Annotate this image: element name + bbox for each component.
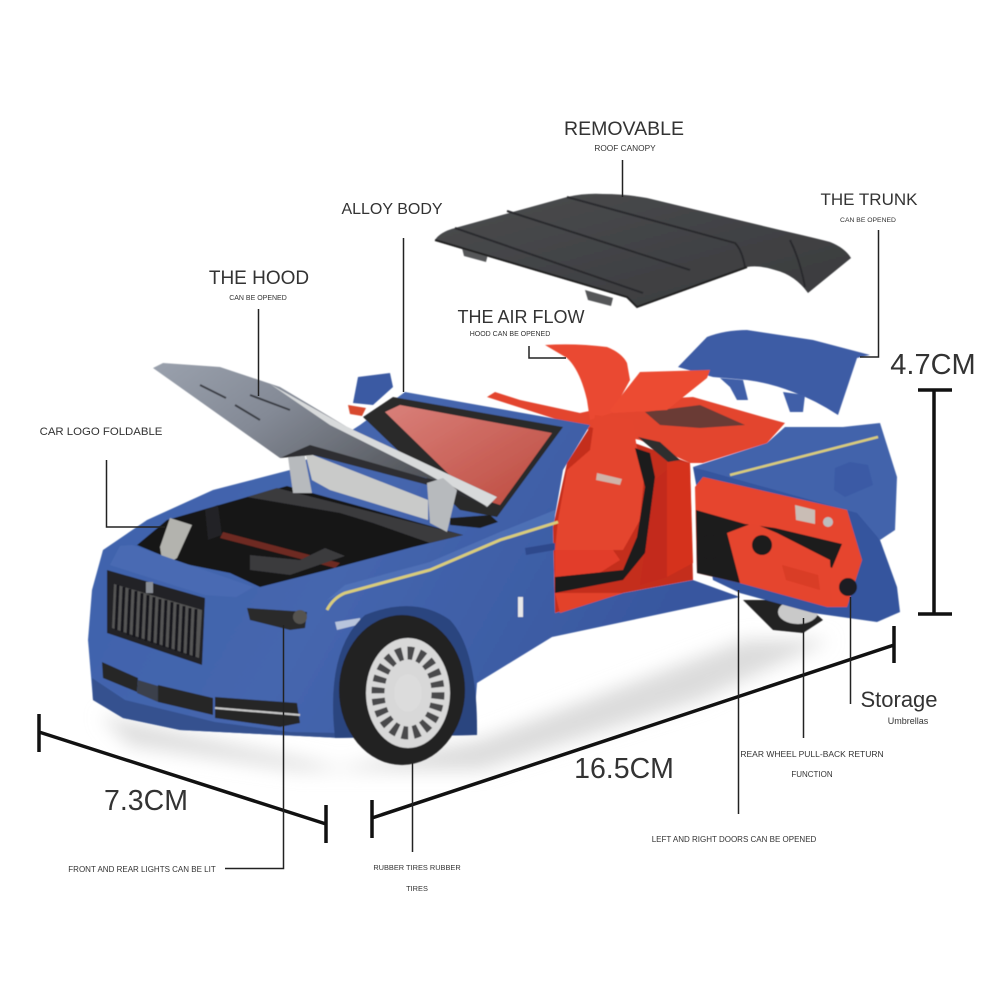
label: storage: Storage [860, 687, 938, 712]
engine bay [137, 486, 463, 587]
bumper vents [102, 662, 300, 727]
label: rear wheel [740, 749, 884, 779]
door mirror [834, 462, 873, 497]
hood slots [200, 385, 290, 420]
main body [88, 392, 740, 738]
rear red deck [487, 392, 785, 463]
seat cushion [555, 550, 620, 577]
label: the trunk [821, 190, 918, 224]
door handle [795, 505, 815, 524]
label: the trunk: CAN BE OPENED [840, 217, 896, 224]
nose panel [110, 545, 253, 597]
label: the hood: THE HOOD [209, 268, 309, 289]
label: the hood [209, 268, 309, 302]
leader line: logo [106, 460, 165, 527]
engine detail [220, 532, 340, 568]
label: removable: REMOVABLE [564, 118, 684, 140]
label: storage: Umbrellas [888, 716, 929, 726]
door hinge [839, 578, 857, 596]
grille [107, 570, 205, 665]
door opening [553, 427, 693, 613]
yellow pinstripes [327, 522, 558, 610]
label: rear wheel: FUNCTION [791, 770, 833, 779]
leader line: rear wheel [802, 618, 804, 738]
dimension: height 4.7CM [890, 349, 976, 614]
hood white edge [270, 384, 497, 507]
label: rubber tires: RUBBER TIRES RUBBER [373, 863, 461, 872]
label: the air flow [457, 307, 585, 338]
leader line: air flow [529, 346, 566, 358]
fender highlight [327, 510, 555, 600]
door lower panel [727, 523, 833, 607]
label: rear wheel: REAR WHEEL PULL-BACK RETURN [740, 749, 884, 759]
leader line: roof [622, 160, 624, 197]
rear wheel [743, 600, 823, 633]
seat belt coil [638, 437, 680, 462]
leader line: trunk [860, 230, 878, 357]
fender light [335, 618, 361, 630]
open door [693, 467, 900, 622]
trunk hinges [720, 378, 805, 412]
windshield [363, 397, 563, 517]
door black strip [696, 510, 842, 583]
hood hinge [450, 515, 498, 528]
dimension: width 7.3CM: 7.3CM [104, 785, 188, 817]
roof tabs [462, 248, 613, 306]
label: storage [860, 687, 938, 726]
under hood glass [305, 452, 428, 520]
icon: removable roof canopy [435, 194, 851, 307]
open hood [153, 363, 497, 507]
headlight [247, 608, 307, 630]
label: alloy body: ALLOY BODY [341, 201, 443, 218]
rear pillar [667, 460, 693, 577]
leader line: hood [258, 309, 260, 396]
label: removable: ROOF CANOPY [594, 143, 656, 153]
hood dark band [280, 445, 488, 507]
leader line: lights [225, 625, 284, 868]
leader line: alloy body [402, 238, 404, 392]
leader line: storage [850, 597, 852, 704]
seat black trim [555, 448, 655, 593]
label: doors: LEFT AND RIGHT DOORS CAN BE OPENED [652, 835, 817, 844]
mirror [353, 373, 393, 405]
dimension: length 16.5CM: 16.5CM [574, 753, 674, 785]
dimension: width 7.3CM [39, 714, 326, 843]
label: the air flow: HOOD CAN BE OPENED [470, 331, 550, 338]
icon: toy car [88, 330, 900, 765]
seat back [555, 415, 645, 550]
lower lip shade [92, 678, 340, 738]
carbon panel [247, 488, 463, 543]
hood strut left [287, 447, 312, 493]
hood ornament [160, 518, 192, 567]
door knob [698, 535, 722, 559]
label: car logo foldable: CAR LOGO FOLDABLE [40, 426, 163, 438]
front wheel [333, 606, 477, 765]
leader line: doors [738, 590, 740, 814]
leader line: tires [412, 755, 414, 852]
label: the air flow: THE AIR FLOW [457, 307, 585, 327]
label: removable [564, 118, 684, 153]
rear body [693, 423, 897, 540]
dimension: length 16.5CM [372, 626, 894, 838]
red floor [555, 593, 623, 613]
trunk lid [678, 330, 870, 415]
door handle and strip [525, 543, 555, 555]
label: lights: FRONT AND REAR LIGHTS CAN BE LIT [68, 865, 216, 874]
label: rubber tires [373, 863, 461, 893]
dimension: height 4.7CM: 4.7CM [890, 349, 976, 381]
red flaps [545, 344, 630, 420]
label: the trunk: THE TRUNK [821, 190, 918, 209]
door red panel [695, 477, 862, 607]
door speaker [752, 535, 772, 555]
car shadow [100, 640, 830, 770]
label: rubber tires: TIRES [406, 884, 428, 893]
hood strut right [427, 478, 457, 532]
label: the hood: CAN BE OPENED [229, 295, 287, 302]
